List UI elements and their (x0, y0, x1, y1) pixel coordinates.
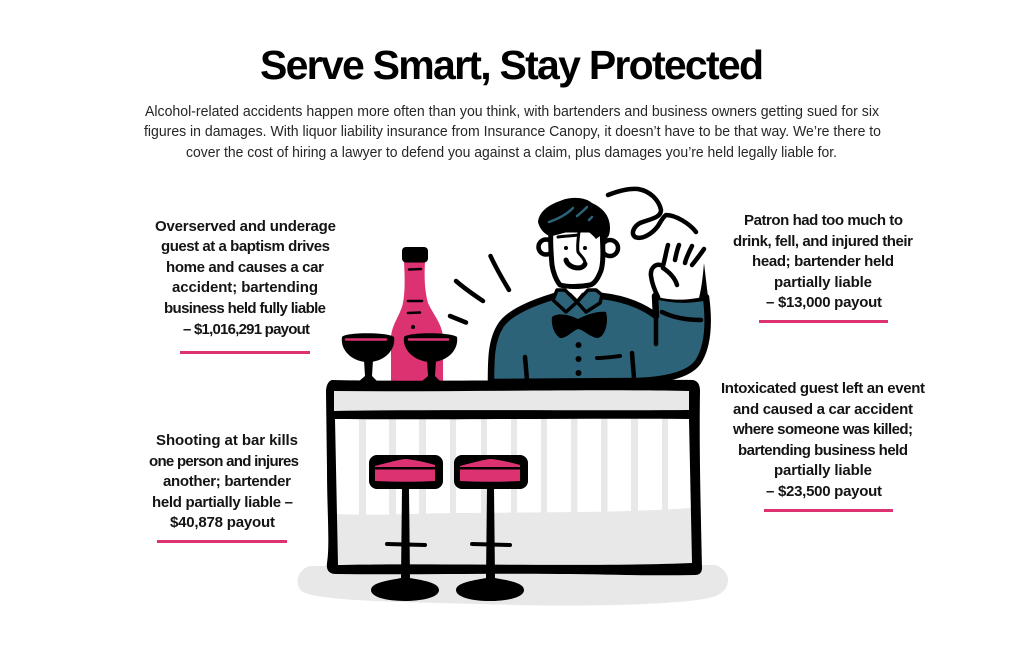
collar (553, 290, 602, 312)
front stripes (359, 418, 668, 516)
counter front (334, 417, 692, 567)
callout: bar shooting payout: another; bartender (163, 473, 291, 490)
callout: patron fall payout: Patron had too much to (744, 212, 903, 229)
callout: baptism guest payout: business held fully liable (164, 300, 326, 317)
callout: baptism guest payout: – $1,016,291 payout (183, 321, 310, 338)
intro paragraph: cover the cost of hiring a lawyer to defend you against a claim, plus damages you’re held legally liable for. (186, 145, 837, 161)
counter lower shade (336, 508, 693, 568)
callout: fatal car accident payout: Intoxicated guest left an event (721, 380, 925, 397)
callout: baptism guest payout: Overserved and underage (155, 218, 336, 235)
waving hand (651, 260, 704, 300)
arm and shirt details (525, 312, 701, 380)
callout: baptism guest payout: home and causes a car (166, 259, 324, 276)
intro paragraph (144, 104, 881, 161)
wine glass left (342, 333, 394, 382)
squiggle wave motion (608, 189, 696, 238)
callout: bar shooting payout (149, 432, 299, 543)
callout: fatal car accident payout: – $23,500 payout (766, 483, 882, 500)
pocket (597, 356, 620, 358)
bartender (491, 198, 708, 382)
counter outline (326, 380, 702, 575)
callout: patron fall payout (733, 212, 913, 323)
callout: fatal car accident payout (721, 380, 925, 512)
intro paragraph: Alcohol-related accidents happen more often than you think, with bartenders and business owners getting sued for six (145, 104, 880, 120)
wine bottle (391, 247, 443, 381)
torso and arm (491, 296, 708, 382)
callout: patron fall payout: partially liable (774, 274, 872, 291)
callout: baptism guest payout: guest at a baptism drives (161, 238, 330, 255)
title: Serve Smart, Stay Protected (260, 42, 764, 88)
spark lines (450, 256, 509, 322)
callout: baptism guest payout: accident; bartending (172, 279, 318, 296)
callout: fatal car accident payout: partially liable (774, 462, 872, 479)
callout: patron fall payout: – $13,000 payout (766, 294, 882, 311)
illustration: bartender at bar (298, 189, 728, 605)
face (551, 230, 603, 286)
counter top panel (332, 389, 691, 412)
bar stool left (369, 455, 443, 601)
bow tie (552, 312, 607, 338)
callout: patron fall payout: drink, fell, and injured their (733, 233, 913, 250)
callout: bar shooting payout: Shooting at bar kills (156, 432, 298, 449)
hair highlights (549, 207, 592, 222)
floor shadow (298, 565, 728, 605)
callout: fatal car accident payout: where someone was killed; (732, 421, 913, 438)
callout: bar shooting payout: $40,878 payout (170, 514, 275, 531)
facial features (558, 232, 587, 268)
callout: patron fall payout: head; bartender held (752, 253, 894, 270)
ears (538, 240, 618, 256)
callout: baptism guest payout (155, 218, 336, 354)
callout: bar shooting payout: held partially liable – (152, 494, 293, 511)
wine glass right (404, 333, 457, 382)
neck (565, 287, 587, 299)
callout: fatal car accident payout: bartending business held (738, 442, 908, 459)
callout: fatal car accident payout: and caused a car accident (733, 401, 913, 418)
intro paragraph: figures in damages. With liquor liability insurance from Insurance Canopy, it doesn’t have to be that way. We’re there to (144, 124, 881, 140)
hair (538, 198, 610, 239)
shirt buttons (576, 342, 582, 376)
callout: bar shooting payout: one person and injures (149, 453, 299, 470)
bar counter (326, 380, 702, 575)
bar stool right (454, 455, 528, 601)
